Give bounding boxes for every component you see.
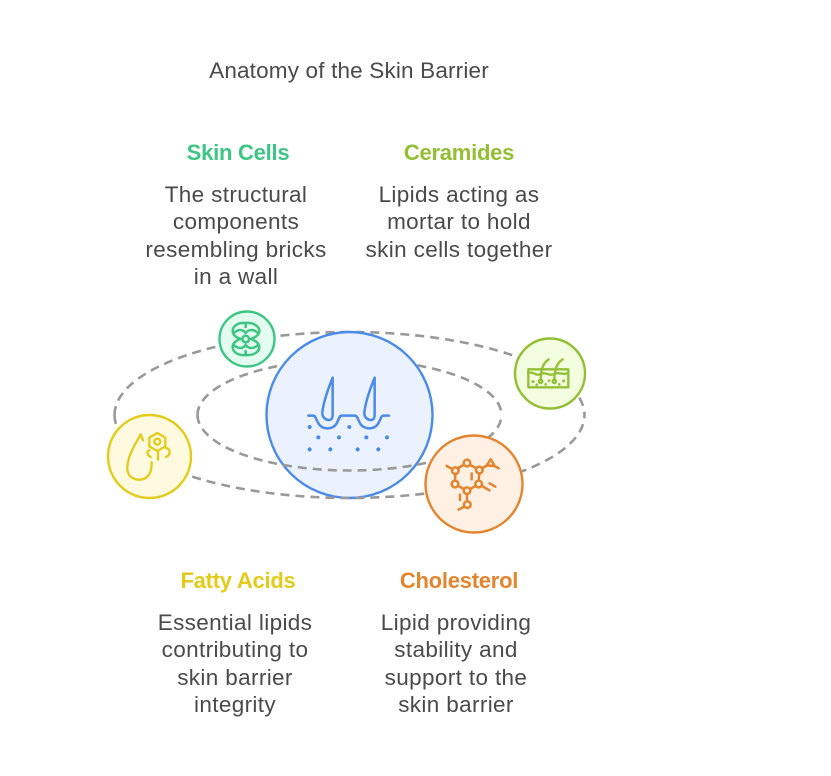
node: cholesterol bbox=[426, 436, 522, 532]
heading: cholesterol: Cholesterol bbox=[400, 568, 518, 593]
inner dashed orbit, rear half bbox=[198, 360, 502, 415]
heading: skin cells: Skin Cells bbox=[187, 140, 289, 165]
title: Anatomy of the Skin Barrier bbox=[209, 58, 489, 83]
text block: skin cells description: resembling bricks bbox=[145, 237, 327, 262]
icon: skin cell bbox=[233, 323, 259, 355]
text block: skin cells description: The structural bbox=[165, 182, 307, 207]
node: skin cells bbox=[220, 312, 274, 366]
text block: ceramides description: skin cells together bbox=[366, 237, 553, 262]
text block: cholesterol description: Lipid providing bbox=[381, 610, 531, 635]
heading: fatty acids: Fatty Acids bbox=[180, 568, 296, 593]
central circle: skin bbox=[266, 332, 432, 498]
icon: skin layer bbox=[528, 359, 568, 387]
heading: ceramides: Ceramides bbox=[404, 140, 514, 165]
node: ceramides bbox=[515, 338, 585, 408]
text block: ceramides description: mortar to hold bbox=[387, 209, 531, 234]
icon: lipid drop with molecule bbox=[127, 433, 170, 480]
text block: fatty acids description: contributing to bbox=[162, 637, 308, 662]
icon: cholesterol molecule bbox=[447, 459, 499, 510]
text block: skin cells description: in a wall bbox=[194, 264, 278, 289]
text block: fatty acids description: Essential lipids bbox=[158, 610, 312, 635]
text block: skin cells description: components bbox=[173, 209, 299, 234]
node: fatty acids bbox=[108, 415, 191, 498]
text block: ceramides description: Lipids acting as bbox=[379, 182, 539, 207]
panel: cholesterol text bbox=[381, 568, 531, 717]
outer dashed orbit, rear half bbox=[114, 332, 584, 415]
panel: ceramides text bbox=[366, 140, 553, 262]
text block: cholesterol description: stability and bbox=[394, 637, 518, 662]
panel: skin cells text bbox=[145, 140, 327, 289]
text block: cholesterol description: support to the bbox=[385, 665, 527, 690]
text block: fatty acids description: integrity bbox=[194, 692, 276, 717]
panel: fatty acids text bbox=[158, 568, 312, 717]
text block: cholesterol description: skin barrier bbox=[398, 692, 514, 717]
orbit front arcs passing over the central circle bbox=[114, 415, 584, 498]
text block: fatty acids description: skin barrier bbox=[177, 665, 293, 690]
icon: skin with hair follicles bbox=[308, 378, 389, 451]
